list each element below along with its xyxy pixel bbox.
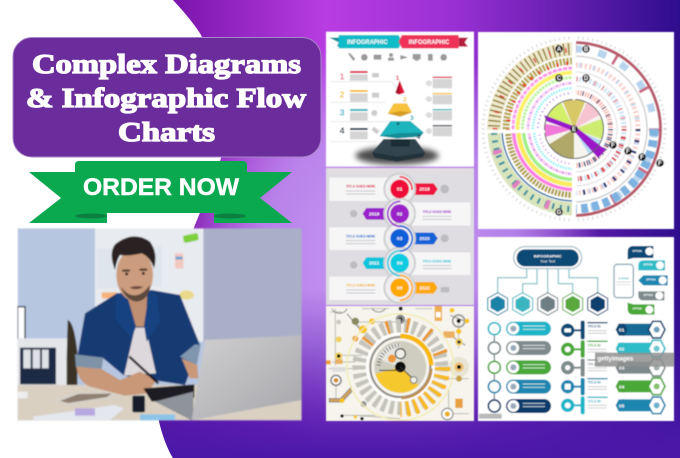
- middle titled list: TITLE 01: [588, 325, 601, 329]
- numbered circles: [384, 174, 415, 303]
- lower-left rainbow rings: [487, 132, 573, 216]
- year tags: 2018: [419, 187, 430, 192]
- order now label: ORDER NOW: [83, 174, 239, 201]
- thumbnail: circular technical diagram: [326, 306, 474, 421]
- left step rows: [330, 71, 399, 142]
- title text: & Infographic Flow: [26, 82, 306, 113]
- letter markers: F: [658, 161, 662, 167]
- inner ring: [544, 100, 604, 158]
- letter markers: E: [572, 127, 576, 133]
- thumbnail: circular genome chart: [478, 32, 674, 229]
- year tags: 2021: [369, 261, 380, 266]
- order now ribbon: [29, 161, 292, 223]
- middle titled list: TITLE 04: [588, 381, 601, 385]
- left step rows: 2: [340, 90, 345, 100]
- middle titled list: TITLE 02: [588, 343, 601, 347]
- letter markers: B: [584, 47, 589, 53]
- 5-step option callouts: OPTION: [643, 263, 653, 266]
- right hex list: [616, 321, 665, 414]
- letter markers: F: [640, 155, 644, 161]
- middle titled list: TITLE 05: [588, 399, 601, 403]
- 5-step option callouts: OPTION: [632, 250, 642, 253]
- right hex list: 02: [619, 347, 625, 353]
- top title pill: INFOGRAPHIC: [534, 253, 562, 258]
- thumbnail: timeline infographic: [326, 168, 474, 305]
- outer tick marks: [483, 38, 665, 220]
- header ribbons: [329, 35, 468, 48]
- numbered circles: 03: [397, 236, 403, 242]
- title text: Charts: [118, 116, 215, 147]
- year tags: 2022: [419, 285, 430, 290]
- connectors: [498, 268, 598, 294]
- upper-left rainbow rings: [486, 42, 573, 131]
- right half data rings: [575, 40, 663, 218]
- header ribbons: INFOGRAPHIC: [409, 39, 450, 46]
- timeline cards: [329, 178, 470, 300]
- letter markers: [555, 45, 664, 216]
- right hex list: 01: [619, 328, 625, 334]
- purple gradient background shape: [157, 0, 680, 458]
- icon row: [348, 53, 447, 61]
- 3d pyramid: 2: [403, 96, 407, 103]
- chord purple band: [544, 115, 606, 158]
- peripheral diagram nodes: [326, 306, 469, 420]
- letter markers: D: [584, 76, 589, 82]
- middle titled list: [561, 321, 608, 414]
- lower-right dense data bars: [576, 128, 660, 214]
- left step rows: 1: [340, 71, 345, 81]
- year tags: 2019: [369, 211, 380, 216]
- right hex list: 04: [619, 384, 625, 390]
- 5-step option callouts: OPTION: [646, 279, 656, 282]
- chord wedges: [544, 100, 604, 159]
- year tags: 2020: [419, 236, 430, 241]
- 3d pyramid: 3: [410, 115, 414, 122]
- header ribbons: INFOGRAPHIC: [347, 39, 388, 46]
- left step rows: 3: [340, 108, 345, 118]
- right hex list: 05: [619, 403, 625, 409]
- 5-step option callouts: OPTION: [643, 294, 653, 297]
- card titles: TITLE GOES HERE: [423, 259, 452, 263]
- 3d pyramid: 1: [396, 75, 400, 82]
- left pill list: [488, 322, 551, 413]
- numbered circles: 05: [397, 285, 403, 291]
- card titles: TITLE GOES HERE: [346, 234, 376, 238]
- 3d pyramid: 4: [417, 134, 421, 141]
- stock watermark: gettyimages: [597, 356, 634, 363]
- card titles: [346, 185, 452, 288]
- letter markers: C: [557, 76, 562, 82]
- inner dial: [374, 341, 426, 393]
- title panel: [13, 38, 321, 157]
- photo: man at desk with laptop: [18, 228, 302, 420]
- top title pill: Your Text: [540, 259, 555, 263]
- card titles: TITLE GOES HERE: [346, 185, 376, 189]
- middle titled list: TITLE 03: [588, 362, 601, 366]
- title text: [26, 48, 306, 147]
- card titles: TITLE GOES HERE: [423, 210, 452, 214]
- title text: Complex Diagrams: [32, 48, 301, 79]
- year tags: [363, 183, 438, 294]
- card titles: TITLE GOES HERE: [346, 284, 376, 288]
- letter markers: F: [611, 143, 615, 149]
- numbered circles: 01: [397, 187, 403, 193]
- letter markers: G: [557, 210, 562, 216]
- thumbnail: pyramid infographic: [326, 32, 474, 167]
- 5-step option callouts: OPTION: [632, 308, 642, 311]
- letter markers: F: [626, 149, 630, 155]
- 3d pyramid: [355, 75, 439, 165]
- 5-step option callouts: [614, 246, 668, 315]
- side icons: [350, 185, 449, 292]
- card body text lines: [346, 191, 451, 293]
- hexagon row: [488, 293, 608, 315]
- letter markers: A: [557, 47, 562, 53]
- left step rows: 4: [340, 126, 345, 136]
- radial spokes: [347, 314, 454, 420]
- right text blocks: [425, 77, 452, 136]
- right hex list: 03: [619, 366, 625, 372]
- numbered circles: 02: [397, 211, 403, 217]
- white ring dividers: [481, 34, 574, 226]
- stock watermark: [479, 353, 674, 419]
- 5-step option callouts: 5 STEP: [619, 276, 629, 280]
- numbered circles: 04: [397, 261, 403, 267]
- top title pill: [514, 247, 582, 269]
- thumbnail: flowchart infographic: [478, 237, 674, 421]
